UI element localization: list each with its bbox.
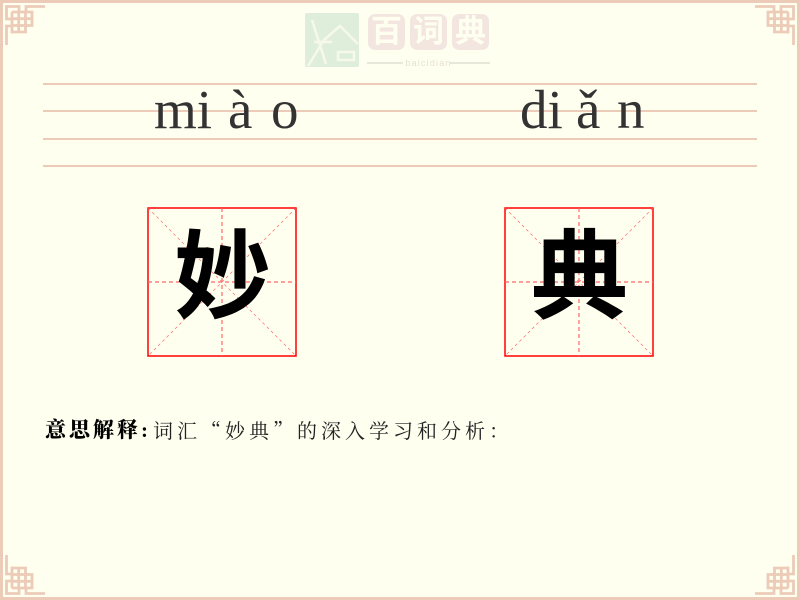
pinyin: miao (154, 79, 298, 140)
pinyin: miao: à (228, 79, 252, 140)
meaning label: 意思解释: (45, 414, 148, 444)
logo wordmark (368, 14, 489, 50)
logo wordmark: 词 (413, 14, 444, 49)
meaning text: 词汇“妙典”的深入学习和分析： (153, 415, 513, 444)
character grid: dian (504, 207, 654, 357)
character grid: miao (147, 207, 297, 357)
logo wordmark: 百 (371, 14, 402, 49)
pinyin: miao: mi (154, 79, 212, 140)
logo wordmark: 典 (455, 14, 486, 49)
character: dian: 典 (531, 223, 628, 332)
logo emblem (305, 13, 359, 67)
logo caption: baicidian (405, 58, 452, 68)
pinyin: dian: di (520, 79, 563, 140)
pinyin: miao: o (271, 79, 298, 140)
character: miao: 妙 (174, 223, 271, 332)
pinyin: dian (520, 79, 644, 140)
pinyin: dian: ǎ (576, 79, 600, 140)
pinyin: dian: n (617, 79, 644, 140)
logo: baicidian (305, 13, 490, 68)
